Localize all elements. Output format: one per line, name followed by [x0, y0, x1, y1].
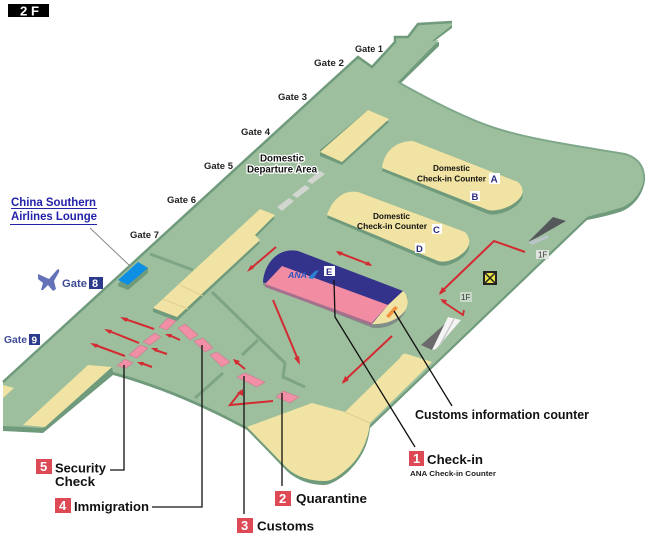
5 Security Check: Check: [55, 474, 96, 489]
2 Quarantine: Quarantine: [296, 491, 367, 506]
check-in counter A B: Check-in Counter: [417, 174, 487, 184]
2 Quarantine: 2: [279, 491, 286, 506]
ANA check-in island E: ANA: [287, 271, 307, 280]
Gate 8 label: [62, 277, 103, 290]
check-in counter C D: Domestic: [373, 211, 410, 221]
red flow arrows: [90, 241, 525, 405]
leader lines: [110, 280, 452, 514]
check-in counter A B: B: [472, 192, 478, 203]
China Southern lounge block: [118, 262, 148, 290]
Gate 9 label: Gate: [4, 335, 27, 346]
ANA check-in island E: E: [326, 267, 332, 278]
gate labels: Gate 4: [241, 127, 271, 138]
floor badge: 2F: [8, 4, 49, 18]
check-in counter C D: Check-in Counter: [357, 221, 428, 231]
1 Check-in: [409, 451, 496, 478]
interior walls: [150, 254, 305, 398]
ANA check-in island E: [263, 250, 408, 328]
1 Check-in: ANA Check-in Counter: [410, 471, 496, 478]
5 Security Check: [36, 459, 107, 489]
check-in counter A B: [382, 141, 523, 214]
label: Domestic Departure Area: [247, 154, 317, 176]
orange customs information counter: [386, 306, 398, 318]
check-in counter C D: [327, 192, 469, 266]
4 Immigration: Immigration: [74, 499, 149, 514]
4 Immigration: 4: [59, 498, 67, 513]
Gate 8 label: 8: [92, 278, 98, 290]
3 Customs: [237, 518, 314, 534]
5 Security Check: Security: [55, 460, 107, 476]
restaurant symbol: [483, 271, 497, 285]
1 Check-in: 1: [413, 451, 420, 466]
yellow area: long block: [153, 209, 275, 321]
grey gate passages: [277, 171, 325, 211]
inspection counters: [117, 318, 299, 403]
gate labels: Gate 6: [167, 195, 196, 206]
lounge label: China Southern: [11, 195, 96, 209]
icon: plane: [38, 269, 59, 291]
1 Check-in: Check-in: [427, 452, 483, 467]
gate labels: Gate 7: [130, 230, 159, 241]
check-in counter C D: C: [433, 225, 440, 236]
label: Domestic Departure Area: Departure Area: [247, 164, 317, 176]
yellow area: lower right: [247, 354, 432, 481]
gate labels: [130, 44, 384, 241]
Customs information counter: Customs information counter: [415, 408, 589, 422]
1F labels: [460, 250, 549, 302]
3 Customs: 3: [241, 518, 248, 533]
gate labels: Gate 5: [204, 161, 234, 172]
check-in counter A B: A: [490, 174, 498, 186]
lounge label: [10, 195, 97, 224]
floor badge: 2F: 2 F: [20, 4, 39, 18]
Gate 9 label: 9: [32, 336, 38, 346]
1F labels: 1F: [461, 293, 470, 302]
yellow area: lower left: [3, 365, 112, 427]
escalators: [421, 217, 566, 350]
check-in counter A B: Domestic: [433, 163, 470, 173]
gate labels: Gate 3: [278, 92, 307, 103]
Gate 8 label: Gate: [62, 278, 87, 290]
3 Customs: Customs: [257, 518, 314, 534]
Gate 9 label: [4, 334, 40, 346]
label: Domestic Departure Area: Domestic: [260, 154, 304, 164]
gate labels: Gate 2: [314, 58, 344, 69]
yellow area: upper block: [320, 110, 389, 165]
check-in counter C D: D: [416, 244, 423, 255]
lounge leader line: [90, 228, 130, 266]
5 Security Check: 5: [40, 459, 47, 474]
gate labels: Gate 1: [355, 44, 384, 55]
1F labels: 1F: [538, 250, 547, 260]
lounge label: Airlines Lounge: [11, 209, 97, 223]
